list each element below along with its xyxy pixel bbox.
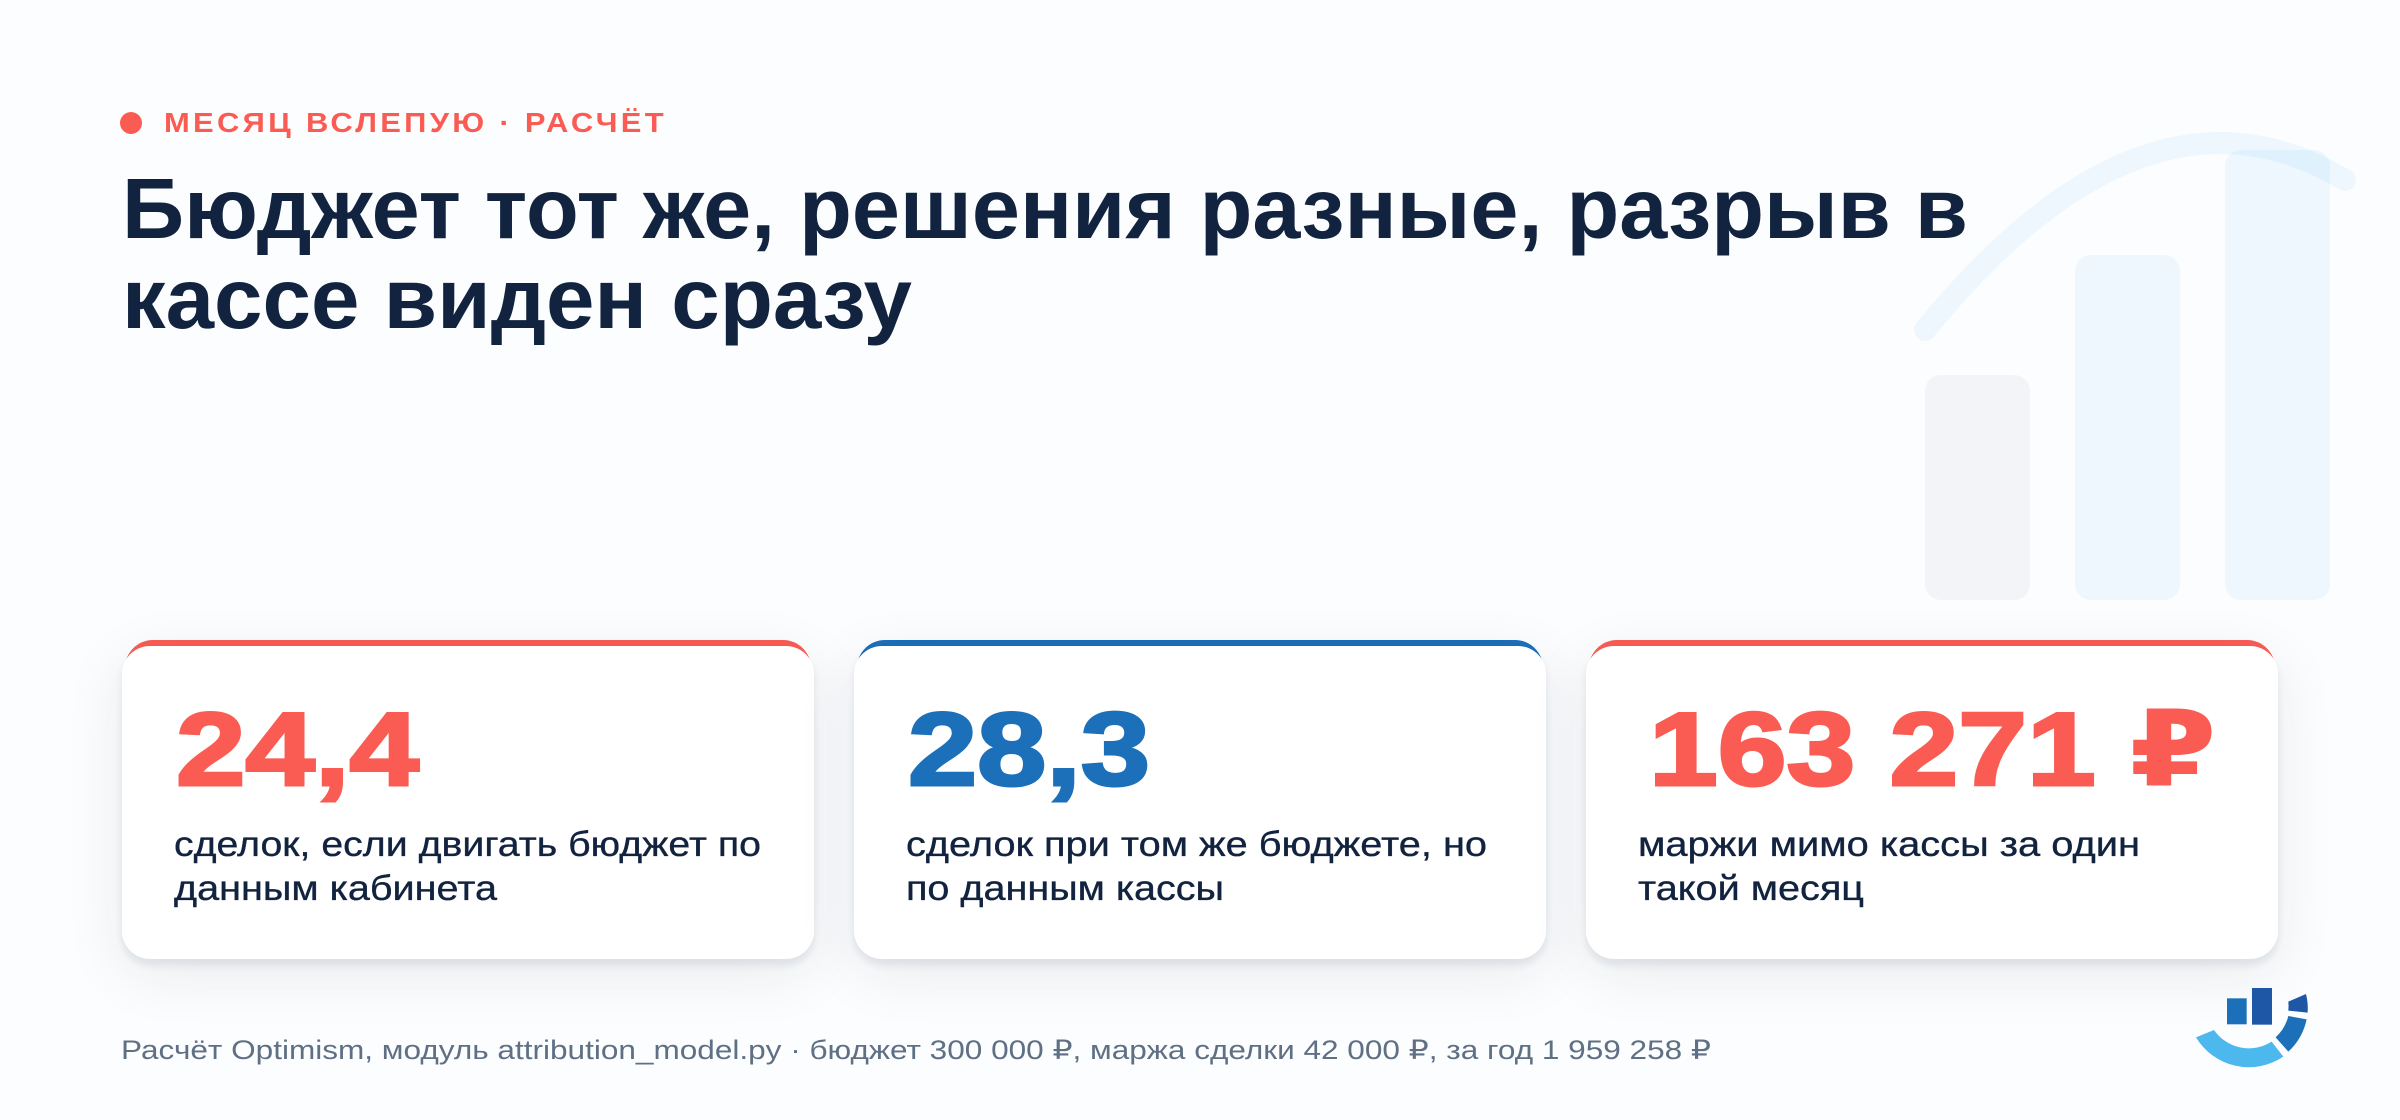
title: кассе виден сразу [122, 252, 912, 347]
metric value: 28,3 [908, 692, 1150, 808]
metric description: маржи мимо кассы за один [1638, 825, 2140, 864]
decorative background chart [1914, 132, 2356, 600]
chart bar: medium [2075, 255, 2180, 600]
title [122, 162, 1968, 347]
metric description: такой месяц [1638, 869, 1864, 908]
chart trend curve [1925, 143, 2345, 330]
metric description [1638, 825, 2140, 908]
panel: card 28,3 [847, 640, 1553, 980]
footer source note: Расчёт Optimism, модуль attribution_model.py · бюджет 300 000 ₽, маржа сделки 42 000 ₽, за год 1 959 258 ₽ [121, 1035, 1711, 1065]
icon: logo [2196, 988, 2308, 1068]
eyebrow: month blind calculation [120, 107, 667, 138]
logo bar right [2252, 988, 2272, 1025]
logo bar left [2227, 998, 2247, 1024]
logo arc mid [2276, 1016, 2307, 1052]
panel: card 24,4 [115, 640, 821, 980]
eyebrow text: МЕСЯЦ ВСЛЕПУЮ · РАСЧЁТ [164, 107, 667, 138]
metric description: сделок при том же бюджете, но [906, 825, 1487, 864]
metric description: сделок, если двигать бюджет по [174, 825, 761, 864]
metric value: 24,4 [176, 692, 419, 808]
title: Бюджет тот же, решения разные, разрыв в [122, 162, 1968, 257]
logo arc light [2196, 1030, 2283, 1067]
icon: eyebrow dot [120, 112, 142, 134]
chart bar: tall [2225, 150, 2330, 600]
metric description [906, 825, 1487, 908]
metric description: данным кабинета [174, 869, 498, 908]
chart bar: small [1925, 375, 2030, 600]
metric description [174, 825, 761, 908]
metric value: 163 271 ₽ [1649, 692, 2216, 808]
logo arc dark [2288, 994, 2308, 1013]
metric description: по данным кассы [906, 869, 1224, 908]
panel: card 163 271 ₽ [1579, 640, 2285, 980]
